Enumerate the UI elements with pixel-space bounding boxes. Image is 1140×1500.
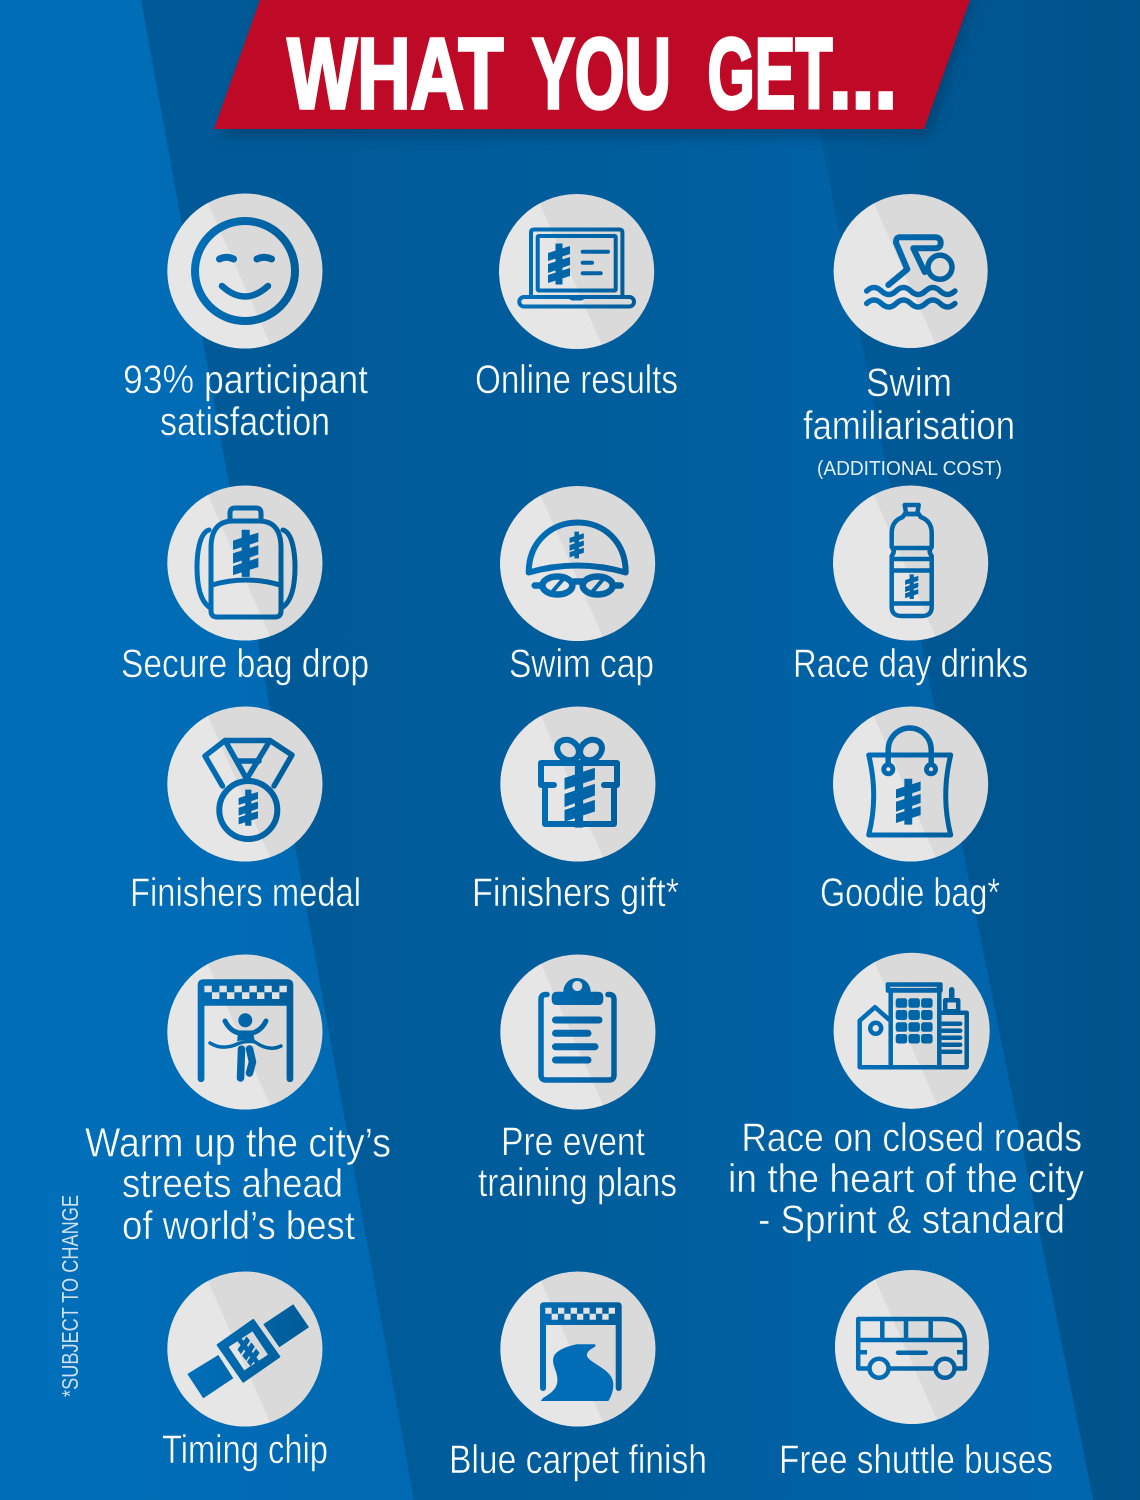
icon: clipboard — [500, 954, 656, 1110]
label — [478, 1120, 677, 1205]
label: Blue carpet finish — [449, 1438, 707, 1482]
icon: swimmer — [834, 194, 988, 348]
item: finishers medal — [130, 706, 361, 915]
label: Goodie bag* — [820, 871, 1000, 915]
note: additional cost: (ADDITIONAL COST) — [817, 458, 1002, 480]
icon: bus — [835, 1270, 989, 1424]
icon: finish line runner — [167, 954, 322, 1110]
icon: timing chip strap — [167, 1272, 322, 1427]
icon: swim cap and goggles — [500, 486, 655, 641]
icon: medal — [167, 706, 322, 862]
title: YOU — [532, 18, 671, 130]
item: online results — [475, 194, 678, 402]
item: swim cap — [500, 486, 655, 686]
title: WHAT — [288, 18, 504, 130]
label — [85, 1120, 391, 1248]
label: Race day drinks — [793, 642, 1028, 686]
icon: backpack — [167, 486, 322, 641]
label: Race on closed roads — [742, 1116, 1082, 1160]
label: Finishers gift* — [472, 871, 679, 915]
item: blue carpet finish — [449, 1272, 707, 1482]
item: swim familiarisation — [803, 194, 1015, 480]
title: GET — [708, 18, 832, 130]
item: race on closed roads — [728, 953, 1084, 1242]
label: Online results — [475, 358, 678, 402]
label: familiarisation — [803, 404, 1015, 448]
label: in the heart of the city — [728, 1157, 1084, 1201]
label: Secure bag drop — [121, 642, 369, 686]
label: Swim cap — [509, 642, 654, 686]
item: 93% participant satisfaction — [123, 194, 368, 444]
item: finishers gift — [472, 706, 679, 915]
title banner — [214, 0, 974, 137]
label: of world’s best — [122, 1204, 355, 1248]
icon: blue carpet under gate — [500, 1272, 656, 1427]
label: Warm up the city’s — [85, 1120, 391, 1166]
title: ... — [829, 18, 897, 130]
item: timing chip — [162, 1272, 328, 1472]
note: subject to change: *SUBJECT TO CHANGE — [57, 1195, 83, 1397]
icon: drinks bottle — [833, 486, 988, 641]
label — [123, 358, 368, 444]
icon: gift box — [500, 706, 656, 862]
icon: laptop — [499, 194, 654, 349]
label: 93% participant — [123, 358, 368, 402]
item: race day drinks — [793, 486, 1028, 686]
label — [803, 361, 1015, 448]
label: training plans — [478, 1161, 677, 1205]
item: warm up — [85, 954, 391, 1248]
title — [288, 18, 897, 130]
item: pre event training plans — [478, 954, 677, 1205]
label: Timing chip — [162, 1428, 328, 1472]
icon: city buildings — [834, 953, 990, 1109]
item: free shuttle buses — [779, 1270, 1053, 1482]
item: secure bag drop — [121, 486, 369, 686]
label: Free shuttle buses — [779, 1438, 1053, 1482]
icon: tote bag — [833, 706, 988, 862]
icon: smiley face — [167, 194, 322, 349]
label: - Sprint & standard — [758, 1198, 1065, 1242]
item: goodie bag — [820, 706, 1000, 915]
label: Swim — [866, 361, 952, 405]
label: streets ahead — [122, 1162, 343, 1206]
label: satisfaction — [160, 400, 330, 444]
label: Finishers medal — [130, 871, 361, 915]
label — [728, 1116, 1084, 1242]
label: Pre event — [501, 1120, 645, 1164]
